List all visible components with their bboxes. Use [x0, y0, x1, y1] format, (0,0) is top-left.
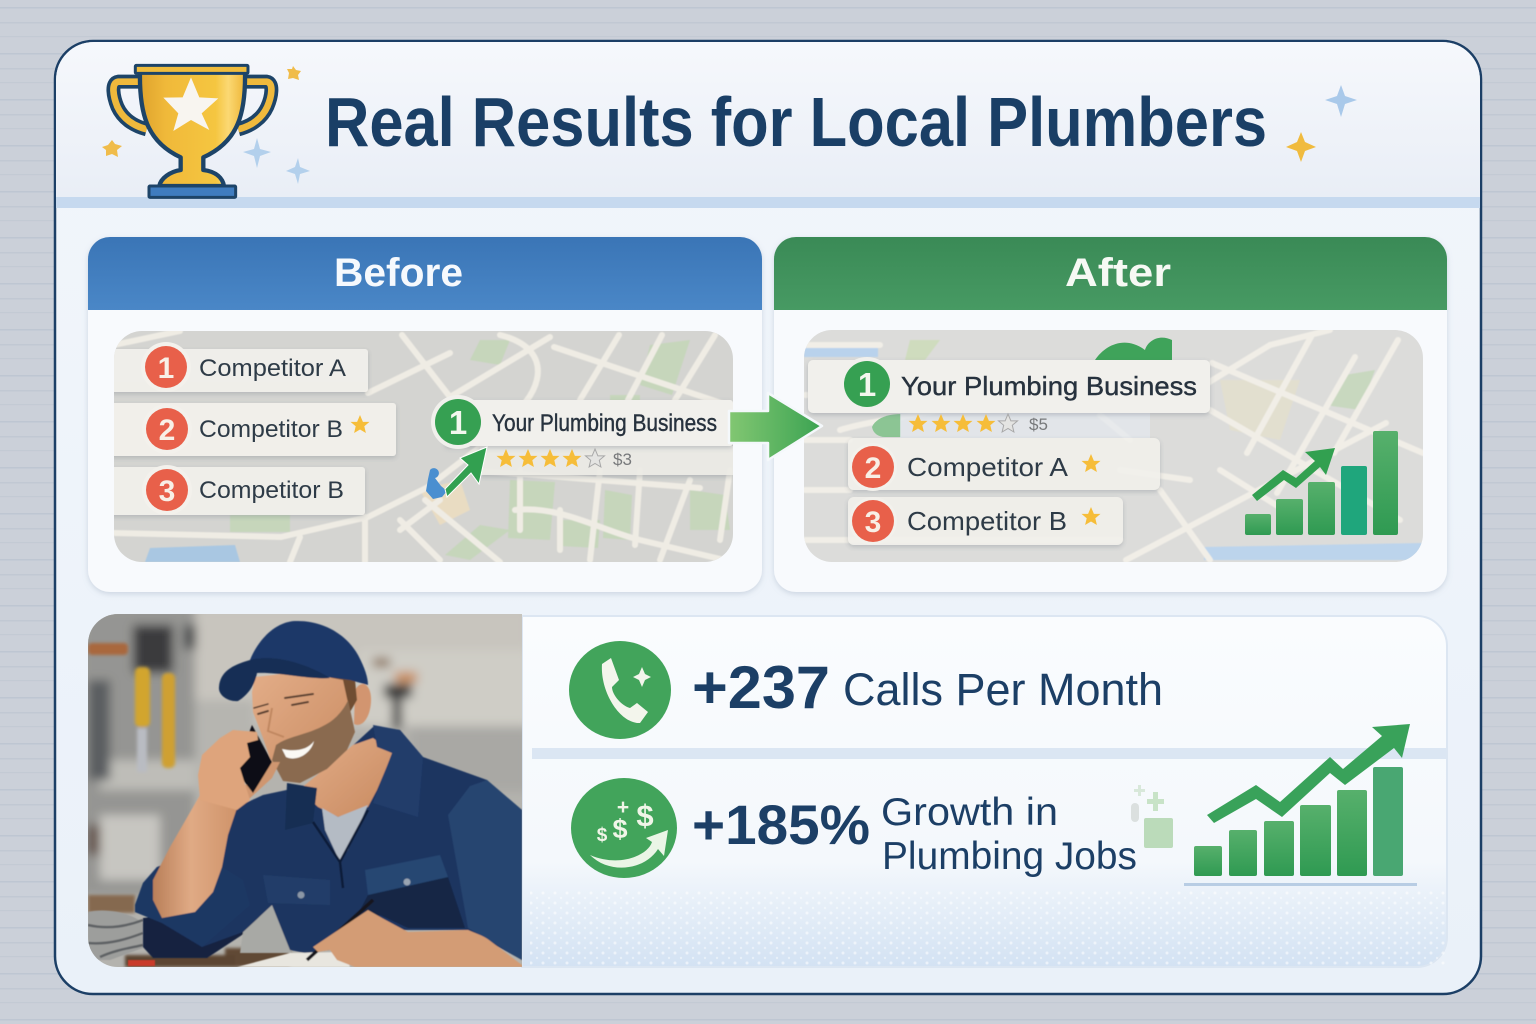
button: [298, 892, 304, 898]
plumber figure: [135, 621, 522, 967]
nose shadow: [268, 708, 284, 737]
metric: calls per month: [569, 641, 1163, 739]
panel: metrics: [522, 616, 1447, 967]
metric: calls per month: Calls Per Month: [843, 664, 1163, 715]
face: [252, 673, 348, 762]
your business listing: $5: [1029, 415, 1048, 434]
eyes and brows: [254, 694, 313, 714]
neck: [300, 738, 393, 817]
cap brim: [219, 658, 330, 701]
hand: [198, 730, 258, 810]
your business listing: [431, 395, 733, 475]
hair: [330, 677, 357, 712]
t-shirt: [322, 805, 368, 862]
metric: job growth: $: [612, 814, 628, 844]
panel: before: [88, 237, 762, 592]
left chest pocket: [263, 875, 330, 905]
gap behind arm: [240, 905, 292, 953]
your business listing: 1: [449, 404, 467, 441]
button: [404, 878, 410, 886]
torso: [135, 727, 522, 960]
pen: [307, 900, 373, 960]
tools and workbench: [88, 643, 290, 967]
competitor row 3: Competitor B: [907, 506, 1067, 536]
paper: [237, 952, 350, 967]
icon: map marker and up arrow: [426, 447, 487, 499]
beard: [272, 700, 355, 783]
metric: job growth: Plumbing Jobs: [882, 835, 1137, 878]
dark torso shading: [352, 877, 465, 928]
header band: [56, 42, 1480, 208]
right chest pocket: [365, 855, 448, 895]
blurred workshop background: [80, 606, 530, 900]
competitor row 2: [106, 403, 396, 456]
forearm: [153, 795, 237, 918]
elbow shadow sleeve: [142, 916, 258, 958]
competitor row 2: Competitor B: [199, 416, 343, 443]
metric: job growth: Growth in: [881, 791, 1058, 834]
competitor row 3: 3: [865, 506, 881, 539]
competitor row 2: 2: [865, 452, 881, 485]
arrow: before to after: [729, 393, 822, 460]
competitor row 2: Competitor A: [907, 452, 1069, 482]
smile: [282, 741, 314, 759]
before header: [88, 237, 762, 310]
photo: smiling plumber on the phone: [80, 606, 530, 967]
metric: job growth: +185%: [692, 793, 870, 856]
icon: sparkles near trophy: [102, 66, 310, 184]
competitor row 3: Competitor B: [199, 477, 344, 504]
metric: job growth: $: [636, 798, 654, 833]
competitor row 1: [106, 342, 368, 392]
cuff: [136, 868, 156, 917]
left collar: [285, 783, 317, 830]
competitor row 3: 3: [159, 475, 175, 508]
ear: [354, 684, 371, 725]
before header: Before: [334, 251, 463, 295]
competitor row 1: Competitor A: [199, 355, 346, 382]
competitor row 2: [848, 438, 1160, 491]
zipper: [313, 810, 368, 888]
title: Real Results for Local Plumbers: [325, 83, 1267, 161]
large growth chart: [1184, 724, 1417, 886]
right sleeve: [448, 780, 522, 960]
green shapes behind listing: [872, 338, 1172, 437]
icon: title sparkles: [1286, 85, 1357, 162]
competitor row 3: [106, 465, 365, 515]
competitor row 2: 2: [159, 414, 175, 447]
cap dome: [250, 621, 368, 685]
sleeve cuff right: [468, 912, 522, 958]
your business listing: [808, 357, 1210, 438]
after map: [804, 330, 1423, 562]
metric: job growth: [571, 778, 1137, 878]
right collar: [373, 725, 423, 817]
writing hand and arm: [313, 910, 522, 967]
panel: after: [774, 237, 1447, 592]
icon: faded plumbing jar: [1131, 785, 1173, 848]
metric: job growth: +: [617, 796, 629, 819]
after header: After: [1065, 251, 1171, 295]
hose coil: [88, 910, 155, 966]
metric: calls per month: +237: [692, 654, 830, 721]
competitor row 1: 1: [158, 352, 174, 385]
metric: job growth: $: [597, 825, 608, 846]
competitor row 3: [848, 497, 1123, 545]
your business listing: Your Plumbing Business: [492, 410, 717, 437]
your business listing: $3: [613, 450, 632, 469]
phone: [237, 725, 272, 793]
your business listing: 1: [858, 366, 876, 403]
before map: [106, 331, 733, 562]
icon: trophy: [113, 65, 271, 197]
after header: [774, 237, 1447, 310]
small growth chart: [1245, 431, 1398, 535]
thumb: [240, 762, 280, 800]
your business listing: Your Plumbing Business: [901, 371, 1197, 401]
